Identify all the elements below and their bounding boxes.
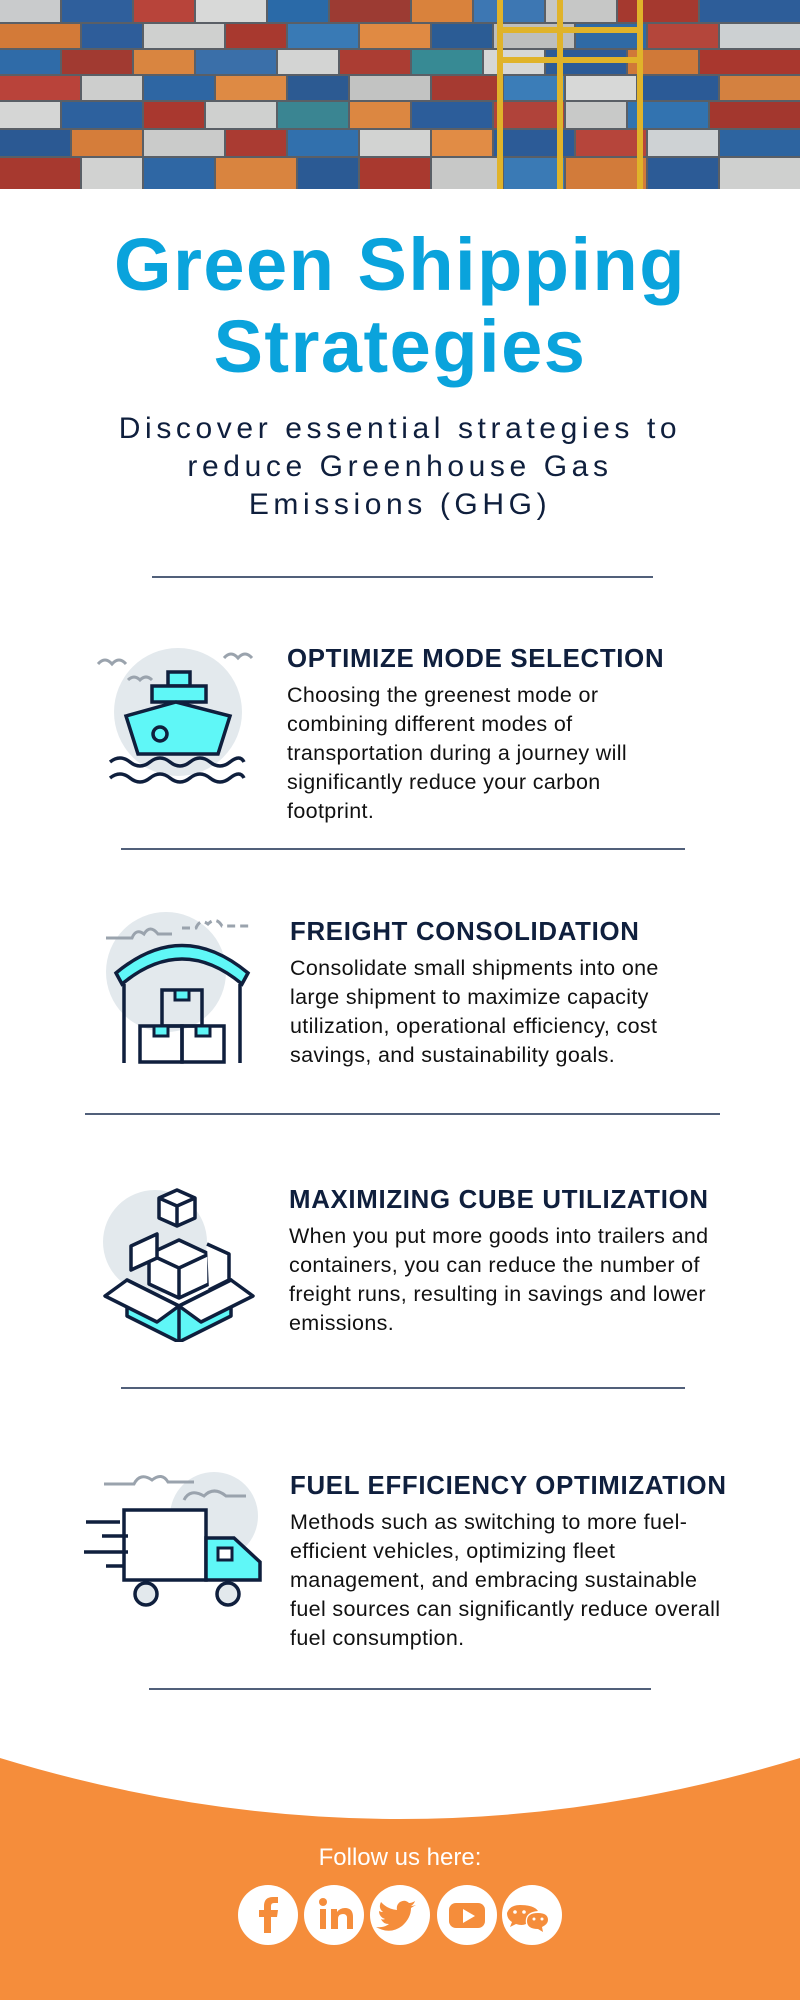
section: maximizing cube utilization: containers, you can reduce the number of: [289, 1253, 700, 1277]
section: fuel efficiency optimization: fuel sources can significantly reduce overall: [290, 1597, 720, 1621]
section: maximizing cube utilization: [289, 1186, 709, 1335]
section: fuel efficiency optimization: [290, 1472, 727, 1650]
section: freight consolidation: large shipment to maximize capacity: [290, 985, 649, 1009]
icon: boxes: [103, 1188, 255, 1342]
section: fuel efficiency optimization: Methods such as switching to more fuel-: [290, 1510, 687, 1534]
section: fuel efficiency optimization: efficient vehicles, optimizing fleet: [290, 1539, 615, 1563]
section: optimize mode selection: transportation during a journey will: [287, 741, 627, 765]
subtitle: Emissions (GHG): [249, 488, 551, 521]
section: freight consolidation: FREIGHT CONSOLIDATION: [290, 918, 640, 946]
section: maximizing cube utilization: MAXIMIZING CUBE UTILIZATION: [289, 1186, 709, 1214]
section: optimize mode selection: combining different modes of: [287, 712, 572, 736]
section: optimize mode selection: OPTIMIZE MODE SELECTION: [287, 645, 664, 673]
section: freight consolidation: utilization, operational efficiency, cost: [290, 1014, 657, 1038]
section: freight consolidation: savings, and sustainability goals.: [290, 1043, 615, 1067]
title: Strategies: [214, 305, 586, 388]
section: maximizing cube utilization: emissions.: [289, 1311, 394, 1335]
icon: warehouse: [106, 912, 250, 1064]
footer text: Follow us here:: [319, 1844, 481, 1871]
section: maximizing cube utilization: freight runs, resulting in savings and lower: [289, 1282, 706, 1306]
section: freight consolidation: [290, 918, 659, 1067]
footer: orange curved band: [0, 1758, 800, 2000]
section: maximizing cube utilization: When you put more goods into trailers and: [289, 1224, 708, 1248]
section: fuel efficiency optimization: FUEL EFFICIENCY OPTIMIZATION: [290, 1472, 727, 1500]
section: freight consolidation: Consolidate small shipments into one: [290, 956, 659, 980]
subtitle: Discover essential strategies to: [119, 412, 681, 445]
section: optimize mode selection: footprint.: [287, 799, 374, 823]
section: fuel efficiency optimization: management, and embracing sustainable: [290, 1568, 697, 1592]
section: fuel efficiency optimization: fuel consumption.: [290, 1626, 464, 1650]
section: optimize mode selection: [287, 645, 664, 823]
icon: ship: [97, 648, 253, 784]
social icons: [238, 1885, 562, 1945]
subtitle: [119, 412, 681, 521]
title: [114, 223, 686, 388]
header photo: container yard: [0, 0, 800, 189]
title: Green Shipping: [114, 223, 686, 306]
subtitle: reduce Greenhouse Gas: [187, 450, 613, 483]
section: optimize mode selection: Choosing the greenest mode or: [287, 683, 598, 707]
icon: truck: [84, 1472, 262, 1607]
section: optimize mode selection: significantly reduce your carbon: [287, 770, 601, 794]
